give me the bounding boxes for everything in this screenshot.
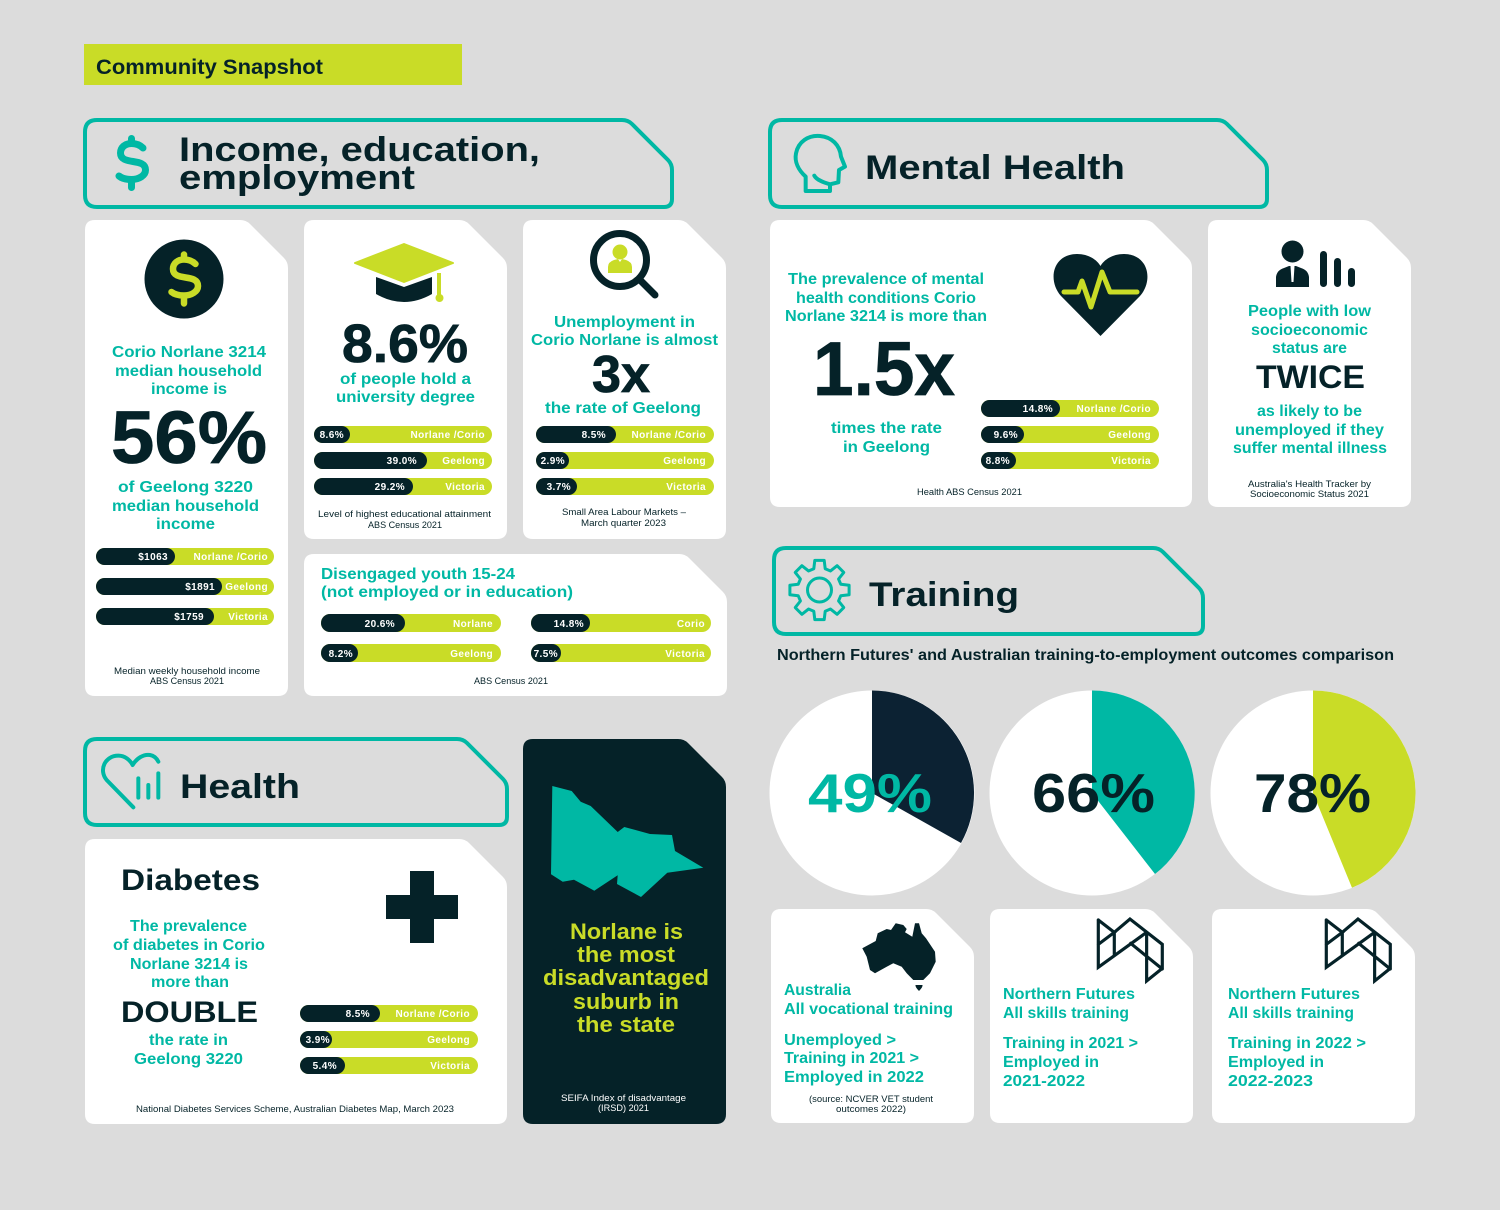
text: twice as likely: unemployed if they (1235, 422, 1384, 439)
source note (318, 509, 491, 531)
bar chart: mental health: Victoria (1111, 456, 1151, 467)
text: Northern Futures 2021 (1003, 986, 1138, 1090)
bar chart: unemployment: 3.7% (547, 482, 571, 493)
text: Northern Futures 2021: Employed in (1003, 1054, 1099, 1071)
source note: ABS Census 2021 (150, 676, 224, 687)
text: disadvantage statement (543, 919, 709, 1037)
bar chart: diabetes: Geelong (427, 1035, 470, 1046)
text: Northern Futures 2022: Northern Futures (1228, 986, 1360, 1003)
bar chart: weekly income: $1759 (174, 612, 204, 623)
text: Australia training: Employed in 2022 (784, 1069, 924, 1086)
text: income comparison: 56% (111, 396, 267, 479)
source note: (source: NCVER VET student (809, 1094, 933, 1105)
panel: diabetes (85, 839, 507, 1124)
text: Northern Futures 2022: 2022-2023 (1228, 1073, 1313, 1090)
section header: health: Health (180, 768, 300, 806)
icon: Victoria map (551, 786, 703, 897)
bar chart: weekly income: Norlane /Corio (194, 552, 268, 563)
icon: plus cross (386, 871, 458, 943)
text: Northern Futures 2022: All skills training (1228, 1005, 1354, 1022)
pie chart: 66%: 66% (1032, 762, 1155, 824)
icon: Northern Futures logo (1326, 919, 1390, 981)
section header: training (774, 548, 1203, 634)
text: prevalence statistic: 1.5x (813, 327, 955, 412)
text: prevalence statistic: Norlane 3214 is more than (785, 308, 987, 325)
bar chart: disengaged youth: 14.8% (554, 619, 584, 630)
source note: outcomes 2022) (836, 1104, 906, 1115)
bar chart: mental health: 9.6% (994, 430, 1018, 441)
text: income comparison: median household (115, 363, 262, 380)
text: unemployment statistic: the rate of Geelong (545, 400, 701, 417)
panel: Northern Futures 2021 (990, 909, 1193, 1123)
bar chart: disengaged youth: Corio (677, 619, 705, 630)
source note (1248, 479, 1371, 500)
section header: health (85, 739, 507, 825)
text: diabetes prevalence: The prevalence (130, 918, 247, 935)
text: prevalence statistic: times the rate (831, 420, 942, 437)
bar chart: unemployment: 2.9% (541, 456, 565, 467)
source note (114, 666, 260, 687)
bar chart: weekly income: Geelong (225, 582, 268, 593)
bar chart: unemployment (536, 426, 714, 495)
text: Australia training (784, 982, 953, 1086)
section header: income, education, employment (85, 120, 672, 207)
bar chart: university degree: Victoria (445, 482, 485, 493)
text: disadvantage statement: suburb in (573, 989, 679, 1014)
text: diabetes prevalence: Diabetes (121, 864, 260, 897)
source note: Australia's Health Tracker by (1248, 479, 1371, 490)
text: twice as likely (1233, 303, 1387, 457)
text: Australia training: Training in 2021 > (784, 1050, 919, 1067)
section header: income, education, employment: employment (179, 159, 415, 197)
text: prevalence statistic (785, 271, 987, 456)
text: Northern Futures 2022: Employed in (1228, 1054, 1324, 1071)
bar chart: disengaged youth: 7.5% (534, 649, 558, 660)
text: diabetes prevalence: DOUBLE (121, 996, 258, 1029)
heading: disengaged youth: Disengaged youth 15-24 (321, 566, 515, 583)
bar chart: weekly income: $1891 (185, 582, 215, 593)
bar chart: weekly income (96, 548, 274, 625)
text: disadvantage statement: the state (577, 1012, 675, 1037)
text: Northern Futures 2022 (1228, 986, 1366, 1090)
panel: disengaged youth (304, 554, 727, 696)
icon: teal dollar sign (119, 138, 146, 188)
bar chart: disengaged youth (321, 614, 711, 662)
source note (562, 507, 687, 529)
source note: SEIFA Index of disadvantage (561, 1093, 686, 1104)
text: diabetes prevalence: Norlane 3214 is (130, 956, 248, 973)
bar chart: unemployment: 8.5% (582, 430, 606, 441)
section header: income, education, employment: Income, education, (179, 131, 540, 169)
source note: (IRSD) 2021 (598, 1103, 649, 1114)
section header: training: Training (869, 576, 1019, 614)
heading: disengaged youth (321, 566, 573, 601)
bar chart: diabetes: Victoria (430, 1061, 470, 1072)
text: disadvantage statement: Norlane is (570, 919, 683, 944)
bar chart: diabetes: 5.4% (313, 1061, 337, 1072)
pie chart: 49%: 49% (808, 762, 932, 824)
bar chart: university degree: 8.6% (320, 430, 344, 441)
pie chart: 66% (990, 690, 1195, 896)
bar chart: disengaged youth: Victoria (665, 649, 705, 660)
bar chart: university degree: Norlane /Corio (410, 430, 485, 441)
bar chart: university degree: 29.2% (375, 482, 405, 493)
text: income comparison: income (156, 516, 215, 533)
icon: dollar in circle (144, 240, 224, 318)
text: degree statistic: of people hold a (340, 371, 471, 388)
bar chart: mental health: Norlane /Corio (1076, 404, 1151, 415)
text: prevalence statistic: The prevalence of mental (788, 271, 984, 288)
source note: ABS Census 2021 (368, 520, 442, 531)
text: unemployment statistic (531, 314, 718, 417)
text: Australia training: Australia (784, 982, 851, 999)
icon: Northern Futures logo (1098, 919, 1162, 981)
icon: graduation cap (355, 244, 453, 302)
bar chart: disengaged youth: Geelong (450, 649, 493, 660)
source note: Small Area Labour Markets – (562, 507, 687, 518)
text: income comparison: median household (112, 498, 259, 515)
bar chart: disengaged youth: Norlane (453, 619, 493, 630)
panel: Northern Futures 2022 (1212, 909, 1415, 1123)
panel: median household income (85, 220, 288, 696)
text: twice as likely: as likely to be (1257, 403, 1362, 420)
text: unemployment statistic: Corio Norlane is almost (531, 332, 718, 349)
source note: Level of highest educational attainment (318, 509, 491, 520)
text: diabetes prevalence (113, 864, 265, 1068)
source note: March quarter 2023 (581, 518, 666, 529)
text: twice as likely: People with low (1248, 303, 1372, 320)
text: diabetes prevalence: the rate in (149, 1032, 228, 1049)
bar chart: unemployment: Victoria (666, 482, 706, 493)
icon: Australia map (862, 923, 936, 991)
text: Australia training: Unemployed > (784, 1032, 896, 1049)
text: Northern Futures 2021: All skills training (1003, 1005, 1129, 1022)
bar chart: disengaged youth: 20.6% (365, 619, 395, 630)
text: Northern Futures 2021: Training in 2021 > (1003, 1035, 1138, 1052)
bar chart: university degree: 39.0% (387, 456, 417, 467)
icon: head outline (796, 136, 845, 191)
pie chart: 78% (1210, 690, 1416, 896)
text: prevalence statistic: health conditions Corio (796, 290, 976, 307)
section header: mental health (770, 120, 1267, 207)
icon: person with bars (1276, 240, 1355, 287)
text: diabetes prevalence: more than (151, 974, 229, 991)
bar chart: mental health: 14.8% (1023, 404, 1053, 415)
text: diabetes prevalence: of diabetes in Corio (113, 937, 265, 954)
text: prevalence statistic: in Geelong (843, 439, 930, 456)
text: income comparison: of Geelong 3220 (118, 479, 253, 496)
source note: Socioeconomic Status 2021 (1250, 489, 1369, 500)
bar chart: disengaged youth: 8.2% (329, 649, 353, 660)
text: income comparison: Corio Norlane 3214 (112, 344, 266, 361)
panel: unemployment (523, 220, 726, 539)
text: twice as likely: suffer mental illness (1233, 440, 1387, 457)
title: Community Snapshot (96, 56, 323, 79)
pie chart: 78%: 78% (1254, 762, 1371, 824)
source note: Median weekly household income (114, 666, 260, 677)
section header: mental health: Mental Health (865, 149, 1125, 187)
bar chart: diabetes: 8.5% (346, 1009, 370, 1020)
icon: magnifier with person (594, 234, 655, 295)
source note: ABS Census 2021 (474, 676, 548, 687)
source note: National Diabetes Services Scheme, Australian Diabetes Map, March 2023 (136, 1104, 454, 1115)
bar chart: diabetes (300, 1005, 478, 1074)
text: disadvantage statement: the most (577, 942, 676, 967)
text: twice as likely: status are (1272, 340, 1347, 357)
source note: Health ABS Census 2021 (917, 487, 1022, 498)
text: income comparison (111, 344, 267, 533)
text: Northern Futures 2021: 2021-2022 (1003, 1073, 1085, 1090)
title (84, 44, 462, 85)
icon: heart with bars (103, 755, 158, 807)
bar chart: unemployment: Norlane /Corio (632, 430, 706, 441)
bar chart: weekly income: $1063 (138, 552, 168, 563)
text: unemployment statistic: 3x (592, 346, 650, 404)
bar chart: mental health: 8.8% (986, 456, 1010, 467)
bar chart: university degree (314, 426, 492, 495)
bar chart: university degree: Geelong (442, 456, 485, 467)
panel: university degree (304, 220, 507, 539)
source note (809, 1094, 933, 1115)
text: twice as likely: socioeconomic (1251, 322, 1368, 339)
text: twice as likely: TWICE (1256, 359, 1365, 395)
icon: heart with pulse (1054, 254, 1147, 336)
text: diabetes prevalence: Geelong 3220 (134, 1051, 243, 1068)
bar chart: diabetes: 3.9% (306, 1035, 330, 1046)
text: unemployment statistic: Unemployment in (554, 314, 695, 331)
text: degree statistic (336, 314, 475, 406)
bar chart: mental health (981, 400, 1159, 469)
panel: most disadvantaged suburb (523, 739, 726, 1124)
text: Northern Futures 2021: Northern Futures (1003, 986, 1135, 1003)
text: degree statistic: university degree (336, 389, 475, 406)
text: disadvantage statement: disadvantaged (543, 965, 709, 990)
bar chart: mental health: Geelong (1108, 430, 1151, 441)
text: degree statistic: 8.6% (342, 314, 468, 374)
subheading: outcomes comparison: Northern Futures' and Australian training-to-employment outcomes comparison (777, 647, 1394, 664)
text: Australia training: All vocational training (784, 1001, 953, 1018)
text: income comparison: income is (151, 381, 227, 398)
panel: Australia vocational training (771, 909, 974, 1123)
bar chart: weekly income: Victoria (228, 612, 268, 623)
bar chart: diabetes: Norlane /Corio (396, 1009, 470, 1020)
source note (561, 1093, 686, 1114)
bar chart: unemployment: Geelong (663, 456, 706, 467)
panel: socioeconomic status (1208, 220, 1411, 507)
text: Northern Futures 2022: Training in 2022 > (1228, 1035, 1366, 1052)
panel: mental health prevalence (770, 220, 1192, 507)
icon: gear (790, 560, 849, 620)
heading: disengaged youth: (not employed or in education) (321, 584, 573, 601)
pie chart: 49% (770, 690, 974, 896)
